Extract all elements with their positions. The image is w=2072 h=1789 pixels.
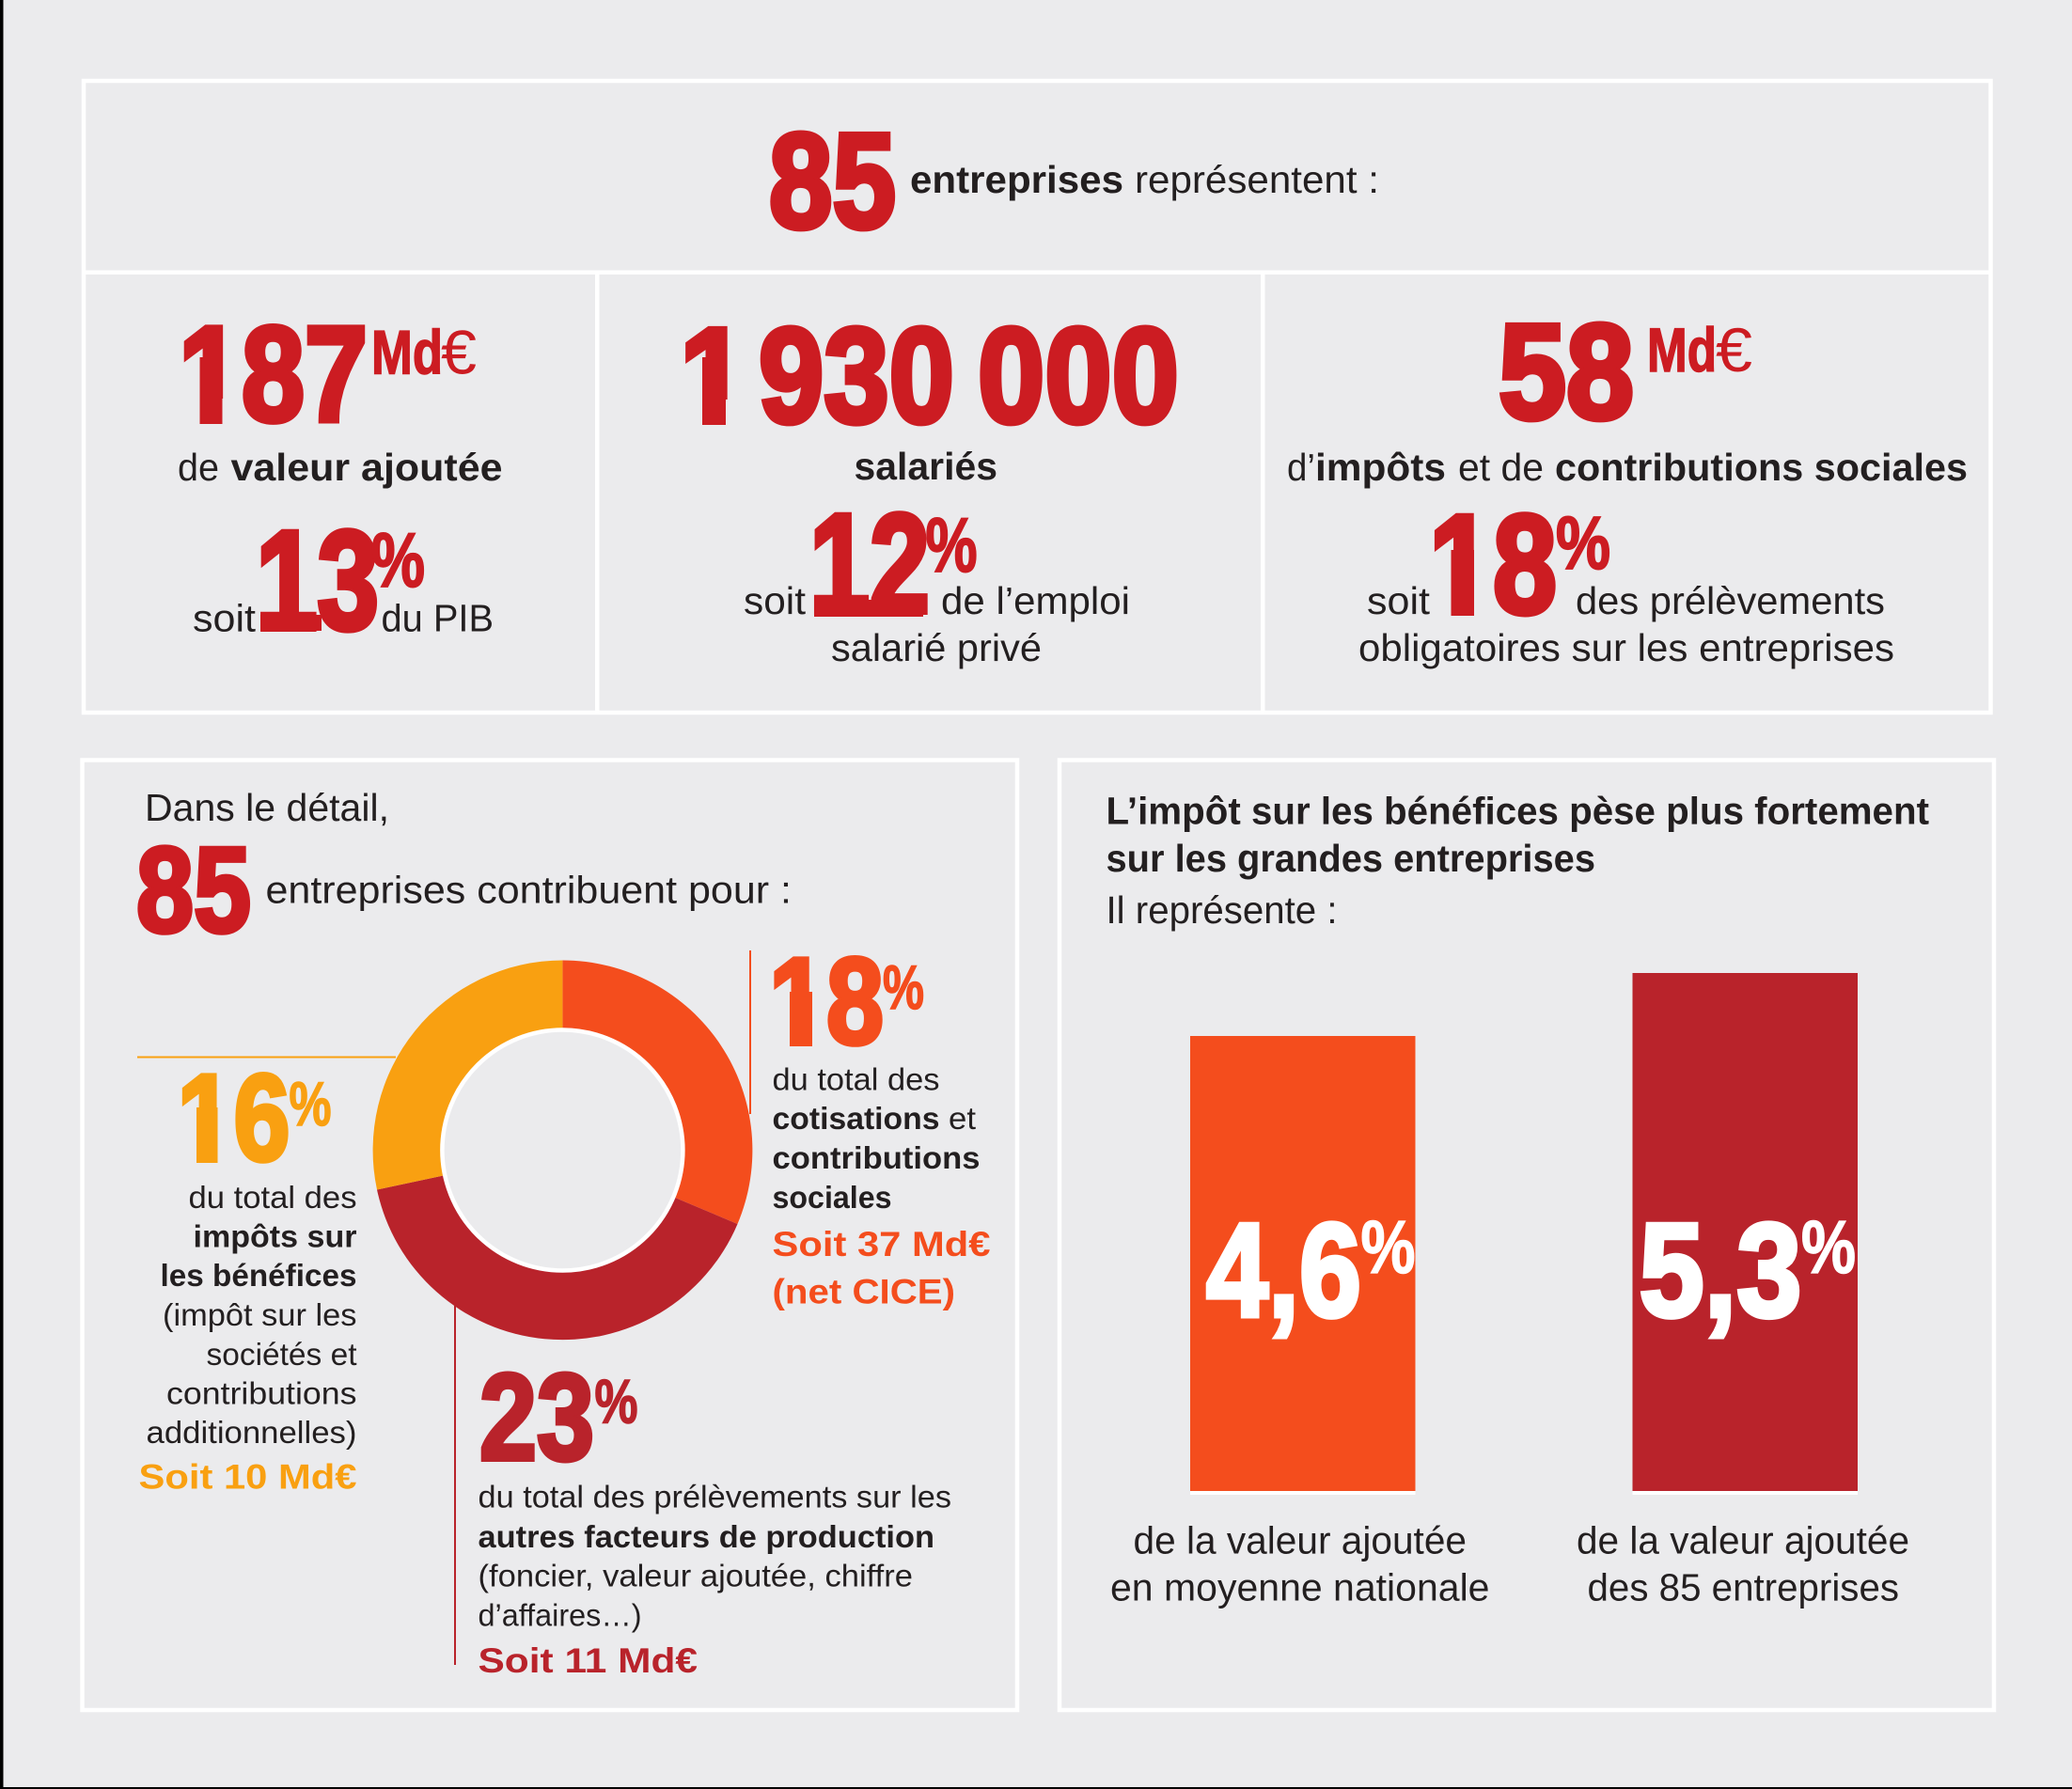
column: impôts et contributions: contributions sociales bbox=[1555, 446, 1968, 489]
caption: moyenne nationale: en moyenne nationale bbox=[1110, 1566, 1489, 1609]
callout: 16% impôts sur les bénéfices: contributions bbox=[166, 1376, 357, 1410]
column: impôts et contributions: € bbox=[1716, 315, 1752, 384]
callout: 16% impôts sur les bénéfices: Soit 10 Md€ bbox=[139, 1457, 357, 1497]
leader line: 23% bbox=[454, 1306, 456, 1665]
heading: 85 entreprises contribuent: entreprises contribuent pour : bbox=[265, 869, 792, 912]
callout: 18% cotisations: 1 bbox=[769, 932, 826, 1070]
column: salariés: 930 bbox=[759, 300, 954, 451]
callout: 16% impôts sur les bénéfices: (impôt sur les bbox=[163, 1297, 357, 1332]
column: salariés: % bbox=[925, 503, 978, 588]
column: valeur ajoutée: soit bbox=[193, 596, 257, 639]
bar: moyenne nationale 4,6%: % bbox=[1361, 1205, 1416, 1289]
heading: 85 entreprises contribuent: 85 bbox=[136, 823, 251, 958]
caption: 85 entreprises: de la valeur ajoutée bbox=[1577, 1519, 1909, 1562]
column: salariés: 1 bbox=[680, 300, 747, 451]
caption: moyenne nationale bbox=[1110, 1519, 1489, 1609]
bar: moyenne nationale 4,6%: 4,6 bbox=[1206, 1196, 1361, 1345]
callout: 23% autres facteurs de production bbox=[478, 1348, 951, 1680]
callout: 18% cotisations bbox=[763, 932, 991, 1310]
callout: 16% impôts sur les bénéfices: additionnelles) bbox=[147, 1415, 357, 1450]
column: impôts et contributions: 8 bbox=[1493, 485, 1557, 643]
leader line: 16% bbox=[137, 1057, 396, 1059]
column: impôts et contributions: % bbox=[1556, 501, 1610, 585]
callout: 18% cotisations: sociales bbox=[773, 1180, 891, 1215]
callout: 18% cotisations: et bbox=[949, 1101, 976, 1136]
heading: impôt sur les bénéfices: Il représente : bbox=[1106, 888, 1337, 932]
heading: impôt sur les bénéfices: L’impôt sur les bénéfices pèse plus fortement bbox=[1106, 790, 1929, 833]
heading: impôt sur les bénéfices bbox=[1106, 790, 1929, 932]
callout: 18% cotisations: cotisations bbox=[773, 1101, 940, 1136]
column: valeur ajoutée: € bbox=[441, 318, 477, 387]
column: valeur ajoutée: 87 bbox=[242, 299, 368, 449]
heading: 85 entreprises représentent: représentent : bbox=[1135, 158, 1379, 201]
column: salariés bbox=[673, 300, 1179, 669]
caption: 85 entreprises bbox=[1577, 1519, 1909, 1609]
column: impôts et contributions: soit bbox=[1367, 579, 1431, 622]
callout: 16% impôts sur les bénéfices: les bénéfices bbox=[160, 1258, 357, 1293]
bar chart bbox=[1110, 973, 1909, 1609]
callout: 16% impôts sur les bénéfices: sociétés et bbox=[207, 1337, 357, 1372]
column: valeur ajoutée: 13 bbox=[256, 501, 379, 659]
column: valeur ajoutée: % bbox=[371, 518, 425, 604]
bar: 85 entreprises 5,3% bbox=[1632, 973, 1858, 1491]
column: salariés: 000 bbox=[978, 300, 1179, 451]
donut chart bbox=[373, 961, 752, 1340]
heading: 85 entreprises représentent: 85 bbox=[769, 105, 896, 257]
callout: 23% autres facteurs de production: 23 bbox=[479, 1348, 594, 1485]
callout: 23% autres facteurs de production: du total des prélèvements sur les bbox=[478, 1480, 951, 1514]
callout: 18% cotisations: 8 bbox=[826, 932, 884, 1070]
column: valeur ajoutée: valeur ajoutée bbox=[231, 446, 502, 489]
column: impôts et contributions: d’ bbox=[1287, 446, 1315, 489]
column: valeur ajoutée: Md bbox=[371, 318, 443, 387]
callout: 23% autres facteurs de production: autres facteurs de production bbox=[478, 1519, 934, 1554]
heading: impôt sur les bénéfices: sur les grandes entreprises bbox=[1106, 837, 1595, 880]
callout: 16% impôts sur les bénéfices: 1 bbox=[177, 1048, 233, 1186]
callout: 18% cotisations: (net CICE) bbox=[773, 1273, 955, 1310]
column: salariés: salariés bbox=[854, 445, 997, 488]
caption: 85 entreprises: des 85 entreprises bbox=[1587, 1566, 1899, 1609]
callout: 16% impôts sur les bénéfices bbox=[139, 1048, 357, 1497]
callout: 18% cotisations: % bbox=[883, 952, 924, 1022]
panel: key figures bbox=[84, 81, 1991, 713]
callout: 16% impôts sur les bénéfices: % bbox=[290, 1069, 331, 1138]
column: salariés: 12 bbox=[809, 484, 930, 642]
callout: 23% autres facteurs de production: % bbox=[594, 1367, 637, 1436]
panel: impôt sur les bénéfices bbox=[1060, 760, 1994, 1710]
column: impôts et contributions bbox=[1287, 296, 1968, 669]
column: impôts et contributions: des prélèvements bbox=[1576, 579, 1885, 622]
callout: 23% autres facteurs de production: (foncier, valeur ajoutée, chiffre bbox=[478, 1559, 913, 1593]
heading: 85 entreprises représentent: entreprises bbox=[910, 158, 1123, 201]
callout: 23% autres facteurs de production: Soit 11 Md€ bbox=[478, 1641, 698, 1680]
column: valeur ajoutée: du PIB bbox=[382, 596, 494, 639]
bar: 85 entreprises 5,3%: 5,3 bbox=[1640, 1196, 1801, 1345]
column: salariés: soit bbox=[744, 579, 807, 622]
column: impôts et contributions: impôts bbox=[1315, 446, 1446, 489]
column: valeur ajoutée: 1 bbox=[179, 299, 242, 449]
callout: 18% cotisations: du total des bbox=[773, 1062, 940, 1096]
leader line: 18% bbox=[749, 950, 751, 1114]
callout: 18% cotisations: contributions bbox=[773, 1140, 980, 1175]
bar: 85 entreprises 5,3%: % bbox=[1801, 1205, 1856, 1289]
column: salariés: salarié privé bbox=[831, 626, 1042, 669]
column: impôts et contributions: et de bbox=[1458, 446, 1544, 489]
callout: 16% impôts sur les bénéfices: impôts sur bbox=[194, 1218, 357, 1254]
callout: 16% impôts sur les bénéfices: du total des bbox=[188, 1180, 357, 1215]
caption: moyenne nationale: de la valeur ajoutée bbox=[1134, 1519, 1467, 1562]
panel: dans le détail bbox=[83, 760, 1017, 1710]
column: impôts et contributions: 58 bbox=[1499, 296, 1634, 447]
column: impôts et contributions: Md bbox=[1647, 315, 1717, 384]
heading: 85 entreprises contribuent: Dans le détail, bbox=[145, 786, 389, 829]
column: valeur ajoutée bbox=[173, 299, 502, 659]
heading: 85 entreprises contribuent bbox=[136, 786, 792, 958]
column: valeur ajoutée: de bbox=[178, 446, 219, 489]
column: salariés: de l’emploi bbox=[941, 579, 1130, 622]
heading: 85 entreprises représentent bbox=[769, 105, 1379, 257]
callout: 23% autres facteurs de production: d’affaires…) bbox=[478, 1598, 641, 1632]
column: impôts et contributions: 1 bbox=[1429, 485, 1493, 643]
callout: 16% impôts sur les bénéfices: 6 bbox=[233, 1048, 290, 1186]
bar: moyenne nationale 4,6% bbox=[1190, 1036, 1416, 1491]
callout: 18% cotisations: Soit 37 Md€ bbox=[773, 1225, 991, 1263]
column: impôts et contributions: obligatoires sur les entreprises bbox=[1358, 626, 1894, 669]
